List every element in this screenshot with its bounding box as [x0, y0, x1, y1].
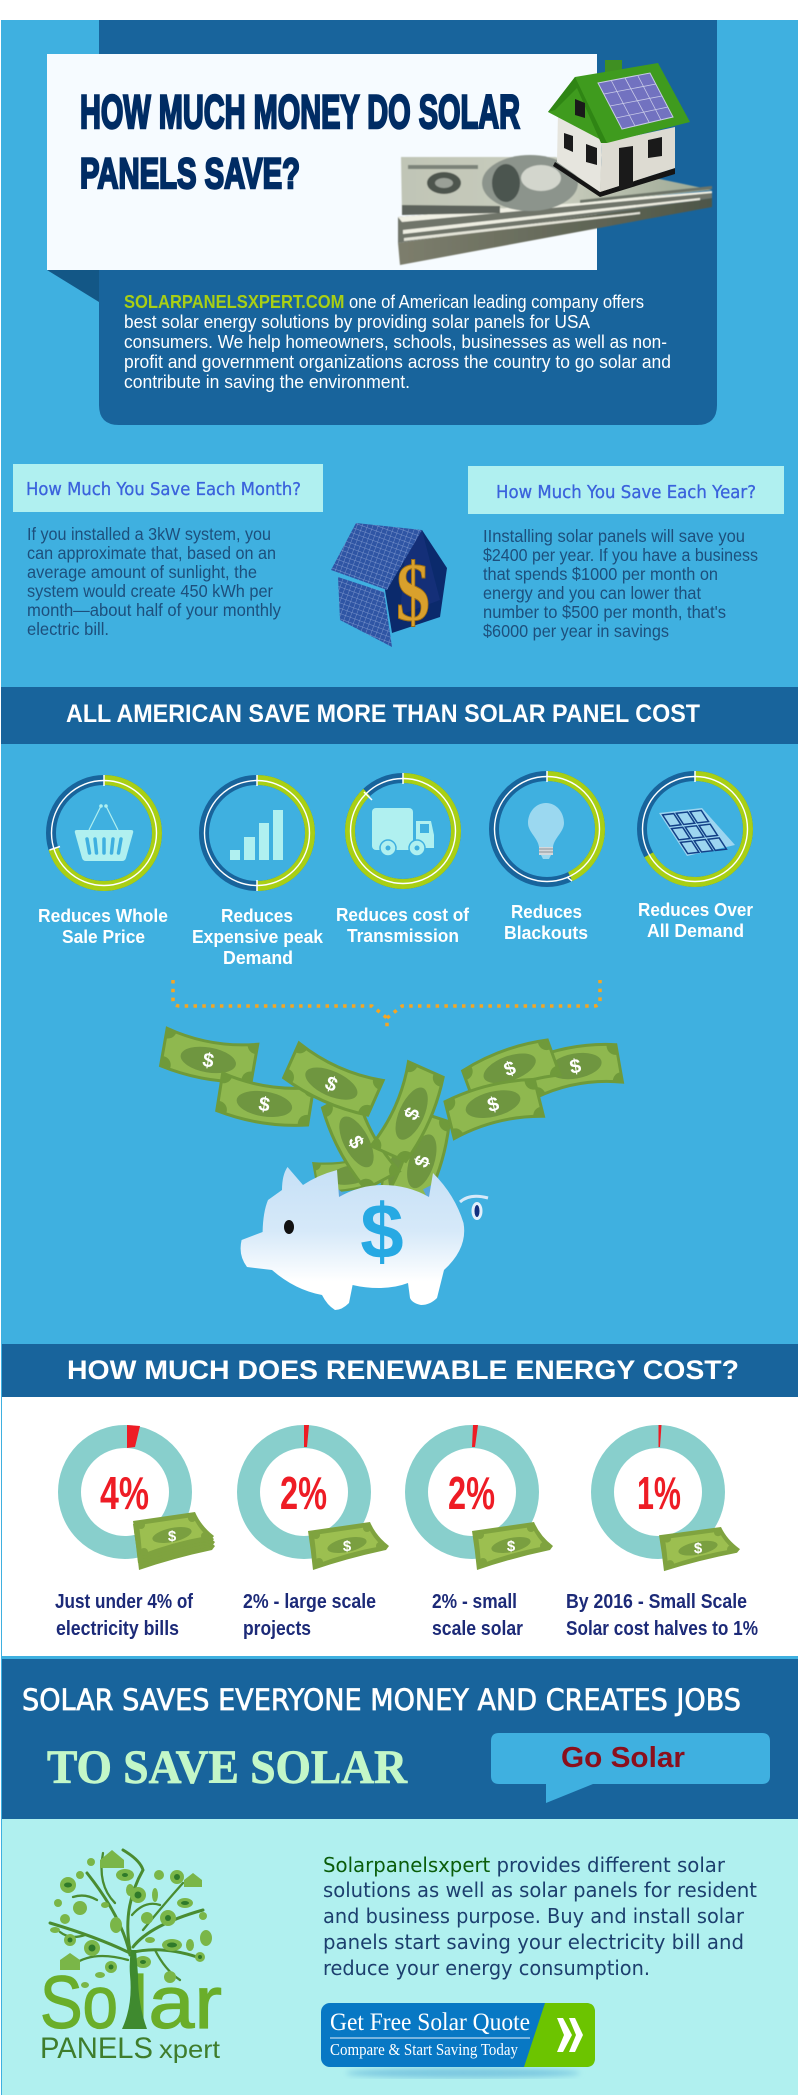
- section heading: renewable energy cost: HOW MUCH DOES RENEWABLE ENERGY COST?: [67, 1355, 739, 1385]
- label: [38, 906, 168, 947]
- bank notes: $: [485, 1093, 501, 1117]
- month text: can approximate that, based on an: [27, 543, 276, 563]
- panel: yearly savings: [468, 466, 784, 641]
- label: Demand: [223, 948, 293, 968]
- intro text: best solar energy solutions by providing solar panels for USA: [124, 312, 590, 332]
- label: [336, 905, 470, 946]
- month text: If you installed a 3kW system, you: [27, 524, 271, 544]
- month text: month—about half of your monthly: [27, 600, 281, 620]
- caption: Solar cost halves to 1%: [566, 1618, 758, 1640]
- month text: electric bill.: [27, 619, 109, 639]
- year text: [483, 526, 758, 641]
- donut: 1 percent: $: [694, 1540, 703, 1557]
- bank notes: $: [257, 1093, 271, 1117]
- label: Reduces Over: [638, 900, 753, 920]
- month heading: [13, 464, 323, 512]
- title: PANELS SAVE?: [80, 150, 300, 198]
- icon: truck: [372, 808, 434, 856]
- month text: system would create 450 kWh per: [27, 581, 273, 601]
- year text: $6000 per year in savings: [483, 621, 669, 641]
- caption: Just under 4% of: [55, 1591, 193, 1613]
- pig body: [241, 1167, 464, 1310]
- intro text: contribute in saving the environment.: [124, 372, 410, 392]
- bank notes: $: [501, 1057, 519, 1081]
- intro text: consumers. We help homeowners, schools, businesses as well as non-: [124, 332, 667, 352]
- title: HOW MUCH MONEY DO SOLAR: [80, 85, 520, 138]
- logo: solar panels xpert tree: So: [40, 1961, 118, 2044]
- caption: projects: [243, 1618, 311, 1640]
- panel: header: [47, 20, 717, 425]
- label: [504, 902, 588, 943]
- ring: whole sale price: [38, 775, 168, 947]
- label: Reduces: [511, 902, 582, 922]
- label: Sale Price: [62, 927, 145, 947]
- caption: [55, 1591, 193, 1640]
- footer text: and business purpose. Buy and install solar: [323, 1904, 745, 1928]
- donut: 2 percent small: $: [507, 1538, 516, 1555]
- illustration: house on money: [398, 60, 712, 265]
- logo: solar panels xpert tree: PANELS: [40, 2032, 153, 2065]
- donut: 2 percent small: 2%: [448, 1467, 495, 1519]
- illustration: money flying into piggy bank: [151, 1019, 631, 1310]
- icon: solar panel: [659, 808, 735, 856]
- to save solar: TO SAVE SOLAR: [47, 1741, 408, 1794]
- banner heading: SOLAR SAVES EVERYONE MONEY AND CREATES JOBS: [22, 1683, 741, 1717]
- dotted bracket arrow: [173, 980, 600, 1027]
- label: [638, 900, 753, 941]
- dollar sign: $: [360, 1187, 404, 1275]
- panel: go solar banner: [2, 1659, 798, 1819]
- donut: 4 percent: $: [168, 1528, 177, 1545]
- logo: solar panels xpert tree: lar: [130, 1961, 222, 2044]
- intro text: profit and government organizations across the country to go solar and: [124, 352, 671, 372]
- caption: 2% - small: [432, 1591, 517, 1613]
- year heading: [468, 466, 784, 514]
- footer text: Solarpanelsxpert provides different solar: [323, 1853, 726, 1877]
- icon: light bulb: [528, 803, 564, 859]
- label: Reduces cost of: [336, 905, 470, 925]
- donut: 1 percent: 1%: [637, 1467, 681, 1519]
- logo: solar panels xpert tree: xpert: [159, 2036, 220, 2064]
- caption: electricity bills: [56, 1618, 179, 1640]
- caption: [566, 1591, 758, 1640]
- year text: IInstalling solar panels will save you: [483, 526, 745, 546]
- label: Blackouts: [504, 923, 588, 943]
- year text: number to $500 per month, that's: [483, 602, 726, 622]
- icon: solar panel house with dollar: $: [396, 546, 430, 639]
- intro text: [124, 292, 671, 392]
- panel: footer: [2, 1819, 798, 2095]
- donut: 2 percent small: [416, 1425, 553, 1640]
- label: [192, 906, 324, 968]
- bank notes: $: [400, 1104, 425, 1124]
- donut: 2 percent large: $: [343, 1538, 352, 1555]
- speech bubble button: [491, 1733, 770, 1803]
- icon: basket: [75, 804, 133, 861]
- caption: scale solar: [432, 1618, 523, 1640]
- icon: bar chart: [230, 810, 283, 860]
- quote button: Get Free Solar Quote: [330, 2009, 530, 2036]
- donut: 1 percent: [566, 1425, 758, 1640]
- slot: [337, 1186, 433, 1198]
- title: [80, 85, 520, 198]
- dark intro panel: [99, 20, 717, 425]
- ribbon fold: [47, 270, 99, 302]
- donut: 2 percent large: [243, 1425, 389, 1640]
- panel: renewable cost donuts: [2, 1397, 798, 1656]
- bank notes: $: [411, 1153, 435, 1170]
- eye: [284, 1220, 294, 1234]
- year text: that spends $1000 per month on: [483, 564, 718, 584]
- label: Reduces: [221, 906, 293, 926]
- intro text: SOLARPANELSXPERT.COM one of American leading company offers: [124, 292, 644, 312]
- ring: overall demand: [638, 771, 753, 941]
- panel: monthly savings: [13, 464, 323, 639]
- quote button: Compare & Start Saving Today: [330, 2040, 518, 2059]
- label: Expensive peak: [192, 927, 324, 947]
- caption: 2% - large scale: [243, 1591, 376, 1613]
- section heading: all american save: ALL AMERICAN SAVE MORE THAN SOLAR PANEL COST: [66, 700, 700, 728]
- label: Reduces Whole: [38, 906, 168, 926]
- label: Transmission: [347, 926, 459, 946]
- section heading: all american save: [1, 687, 798, 744]
- year text: energy and you can lower that: [483, 583, 701, 603]
- footer text: solutions as well as solar panels for resident: [323, 1878, 757, 1902]
- quote button: [321, 2003, 595, 2078]
- tail: [460, 1196, 488, 1220]
- caption: [243, 1591, 376, 1640]
- chevrons: [557, 2018, 583, 2052]
- footer text: reduce your energy consumption.: [323, 1956, 650, 1980]
- year heading: How Much You Save Each Year?: [496, 482, 756, 503]
- footer text: [323, 1853, 757, 1980]
- year text: $2400 per year. If you have a business: [483, 545, 758, 565]
- section heading: renewable energy cost: [2, 1344, 798, 1397]
- donut: 4 percent: 4%: [100, 1467, 149, 1519]
- icon: solar panel house with dollar: [331, 523, 447, 647]
- bank notes: [151, 1019, 631, 1219]
- month heading: How Much You Save Each Month?: [26, 479, 301, 500]
- ring: transmission: [336, 773, 470, 946]
- footer text: panels start saving your electricity bill and: [323, 1930, 744, 1954]
- month text: average amount of sunlight, the: [27, 562, 257, 582]
- bank notes: $: [568, 1055, 583, 1079]
- bank notes: $: [321, 1072, 341, 1097]
- label: All Demand: [647, 921, 744, 941]
- month text: [27, 524, 281, 639]
- ring: peak demand: [192, 775, 324, 968]
- title card: [47, 54, 597, 270]
- speech bubble button: Go Solar: [561, 1742, 685, 1774]
- bank notes: $: [201, 1049, 216, 1073]
- bank notes: $: [343, 1132, 368, 1152]
- caption: [432, 1591, 523, 1640]
- donut: 2 percent large: 2%: [280, 1467, 327, 1519]
- logo: solar panels xpert tree: [40, 1850, 222, 2065]
- caption: By 2016 - Small Scale: [566, 1591, 747, 1613]
- donut: 4 percent: [55, 1425, 215, 1640]
- ring: blackouts: [494, 771, 600, 943]
